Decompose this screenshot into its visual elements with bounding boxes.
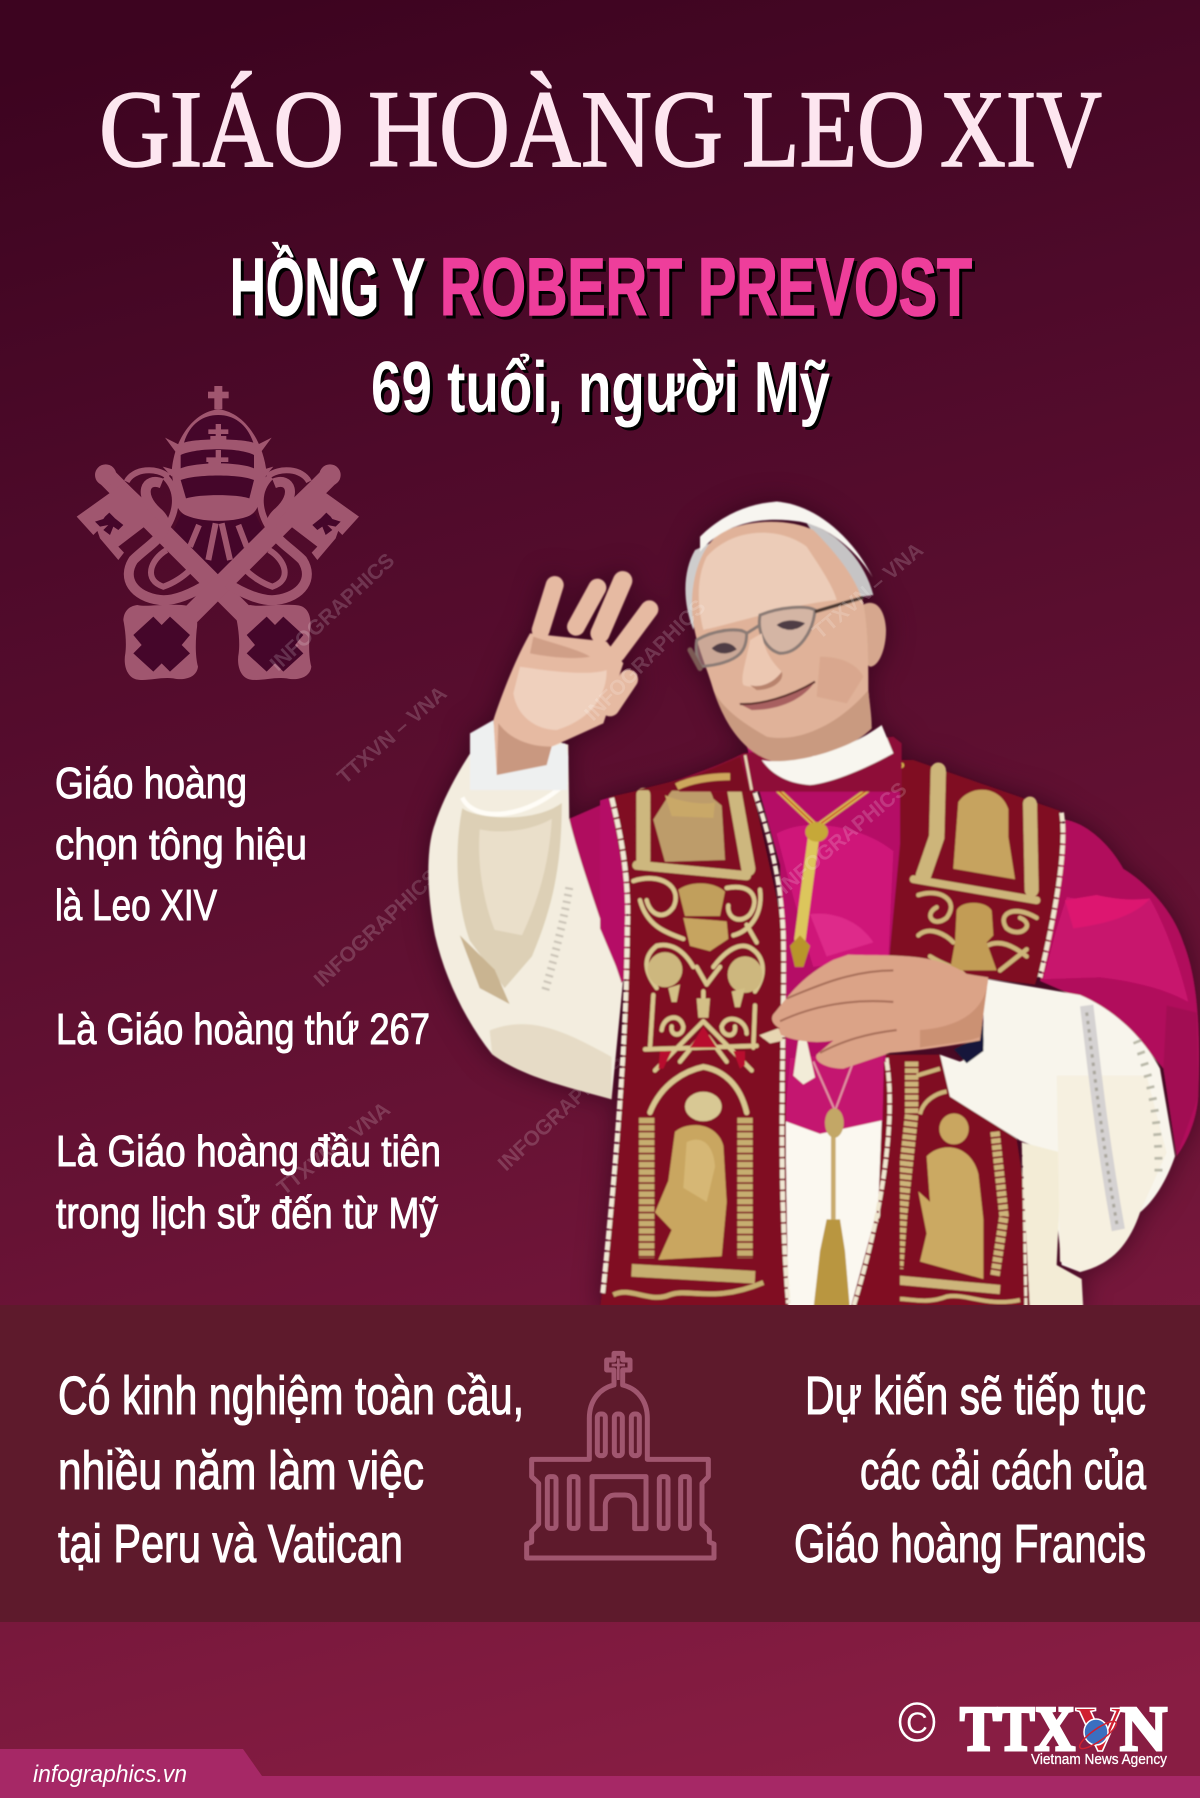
watermarks: TTXVN – VNA: [273, 1098, 395, 1200]
website label: infographics.vn: [33, 1761, 187, 1788]
text: 267th pope: Là Giáo hoàng thứ 267: [56, 1005, 430, 1054]
hand on chest: [760, 955, 988, 1069]
hair: [807, 523, 873, 598]
text: global experience: [58, 1366, 524, 1574]
watermarks: INFOGRAPHICS: [266, 549, 399, 676]
top panel embroidery: [637, 776, 748, 876]
left stole: [600, 762, 787, 1310]
ear: [860, 603, 886, 667]
logo: TTXVN: V: [1075, 1693, 1125, 1764]
scrolls: [633, 878, 763, 1112]
text: global experience: Có kinh nghiệm toàn cầu,: [58, 1366, 524, 1426]
gold cord: [750, 764, 902, 939]
zucchetto: [700, 502, 873, 577]
subtitle: name: HỒNG Y: [230, 242, 425, 333]
watermarks over photo: INFOGRAPHICS: [580, 595, 710, 726]
glasses: [696, 630, 747, 667]
wrist and palm: [541, 581, 649, 707]
subtitle: age and nationality: 69 tuổi, người Mỹ: [371, 348, 830, 428]
stole lower: [780, 1055, 1030, 1310]
watermarks over photo: TTXVN – VNA: [808, 538, 928, 644]
eyes: [712, 620, 805, 653]
collar: [762, 725, 893, 785]
cuff: [470, 720, 568, 790]
mouth: [738, 682, 815, 710]
logo: TTXVN: [960, 1693, 1167, 1768]
white sleeve: [940, 976, 1175, 1272]
text: first American pope: trong lịch sử đến từ Mỹ: [56, 1189, 438, 1238]
text: continuing reforms: [794, 1366, 1147, 1574]
watermarks: INFOGRAPHICS: [494, 1049, 627, 1176]
copyright symbol: [900, 1704, 934, 1740]
dark red neck robe: [667, 737, 902, 792]
raised sleeve: [428, 723, 633, 1099]
logo: TTXVN: N: [1120, 1693, 1167, 1764]
lower right stole continuation: [851, 1062, 900, 1310]
text: global experience: tại Peru và Vatican: [58, 1514, 403, 1574]
centre robe and left stole: [600, 746, 988, 1310]
watermarks: TTXVN – VNA: [333, 682, 451, 789]
text: pontifical name: chọn tông hiệu: [55, 820, 307, 869]
title: XIV: [940, 68, 1102, 190]
columns and saint: [613, 1118, 763, 1297]
title: [99, 68, 1102, 190]
right arm, shoulder and right stole: [780, 760, 1199, 1310]
raised hand and head: [470, 502, 902, 792]
logo: TTXVN: Vietnam News Agency: [1031, 1751, 1167, 1768]
magenta shoulder: [1040, 820, 1199, 1156]
icon: church: [527, 1353, 714, 1558]
face: [692, 522, 872, 762]
magenta cassock: [747, 746, 900, 1135]
watermarks over photo: INFOGRAPHICS: [773, 778, 912, 899]
dark cuff: [954, 981, 984, 1063]
watermarks: INFOGRAPHICS: [310, 865, 443, 992]
text: pontifical name: Giáo hoàng: [55, 759, 247, 808]
text: pontifical name: là Leo XIV: [55, 881, 218, 930]
photo: pope portrait: [428, 502, 1199, 1310]
subtitle: name: ROBERT PREVOST: [440, 242, 972, 333]
text: pontifical name: [55, 759, 307, 930]
title: GIÁO: [99, 68, 344, 190]
footer band: [0, 1749, 1200, 1798]
stole upper: [780, 760, 1064, 984]
magenta left of stole: [600, 797, 628, 977]
text: first American pope: Là Giáo hoàng đầu tiên: [56, 1127, 441, 1176]
copyright symbol: C: [906, 1707, 928, 1740]
title: LEO: [742, 68, 925, 190]
text: global experience: nhiều năm làm việc: [58, 1441, 424, 1501]
tassel: [793, 1041, 815, 1084]
pull cord and acorn: [813, 1062, 853, 1111]
logo: TTXVN: TTX: [960, 1693, 1075, 1764]
subtitle: name: [230, 242, 972, 333]
watermarks: [266, 549, 627, 1200]
panel: experience and outlook: [0, 1305, 1200, 1622]
title: HOÀNG: [368, 68, 723, 190]
icon: papal keys emblem: [77, 386, 359, 680]
watermarks over photo: [580, 538, 928, 899]
text: first American pope: [56, 1127, 441, 1238]
lower alb: [785, 1121, 882, 1310]
nose: [742, 633, 782, 687]
